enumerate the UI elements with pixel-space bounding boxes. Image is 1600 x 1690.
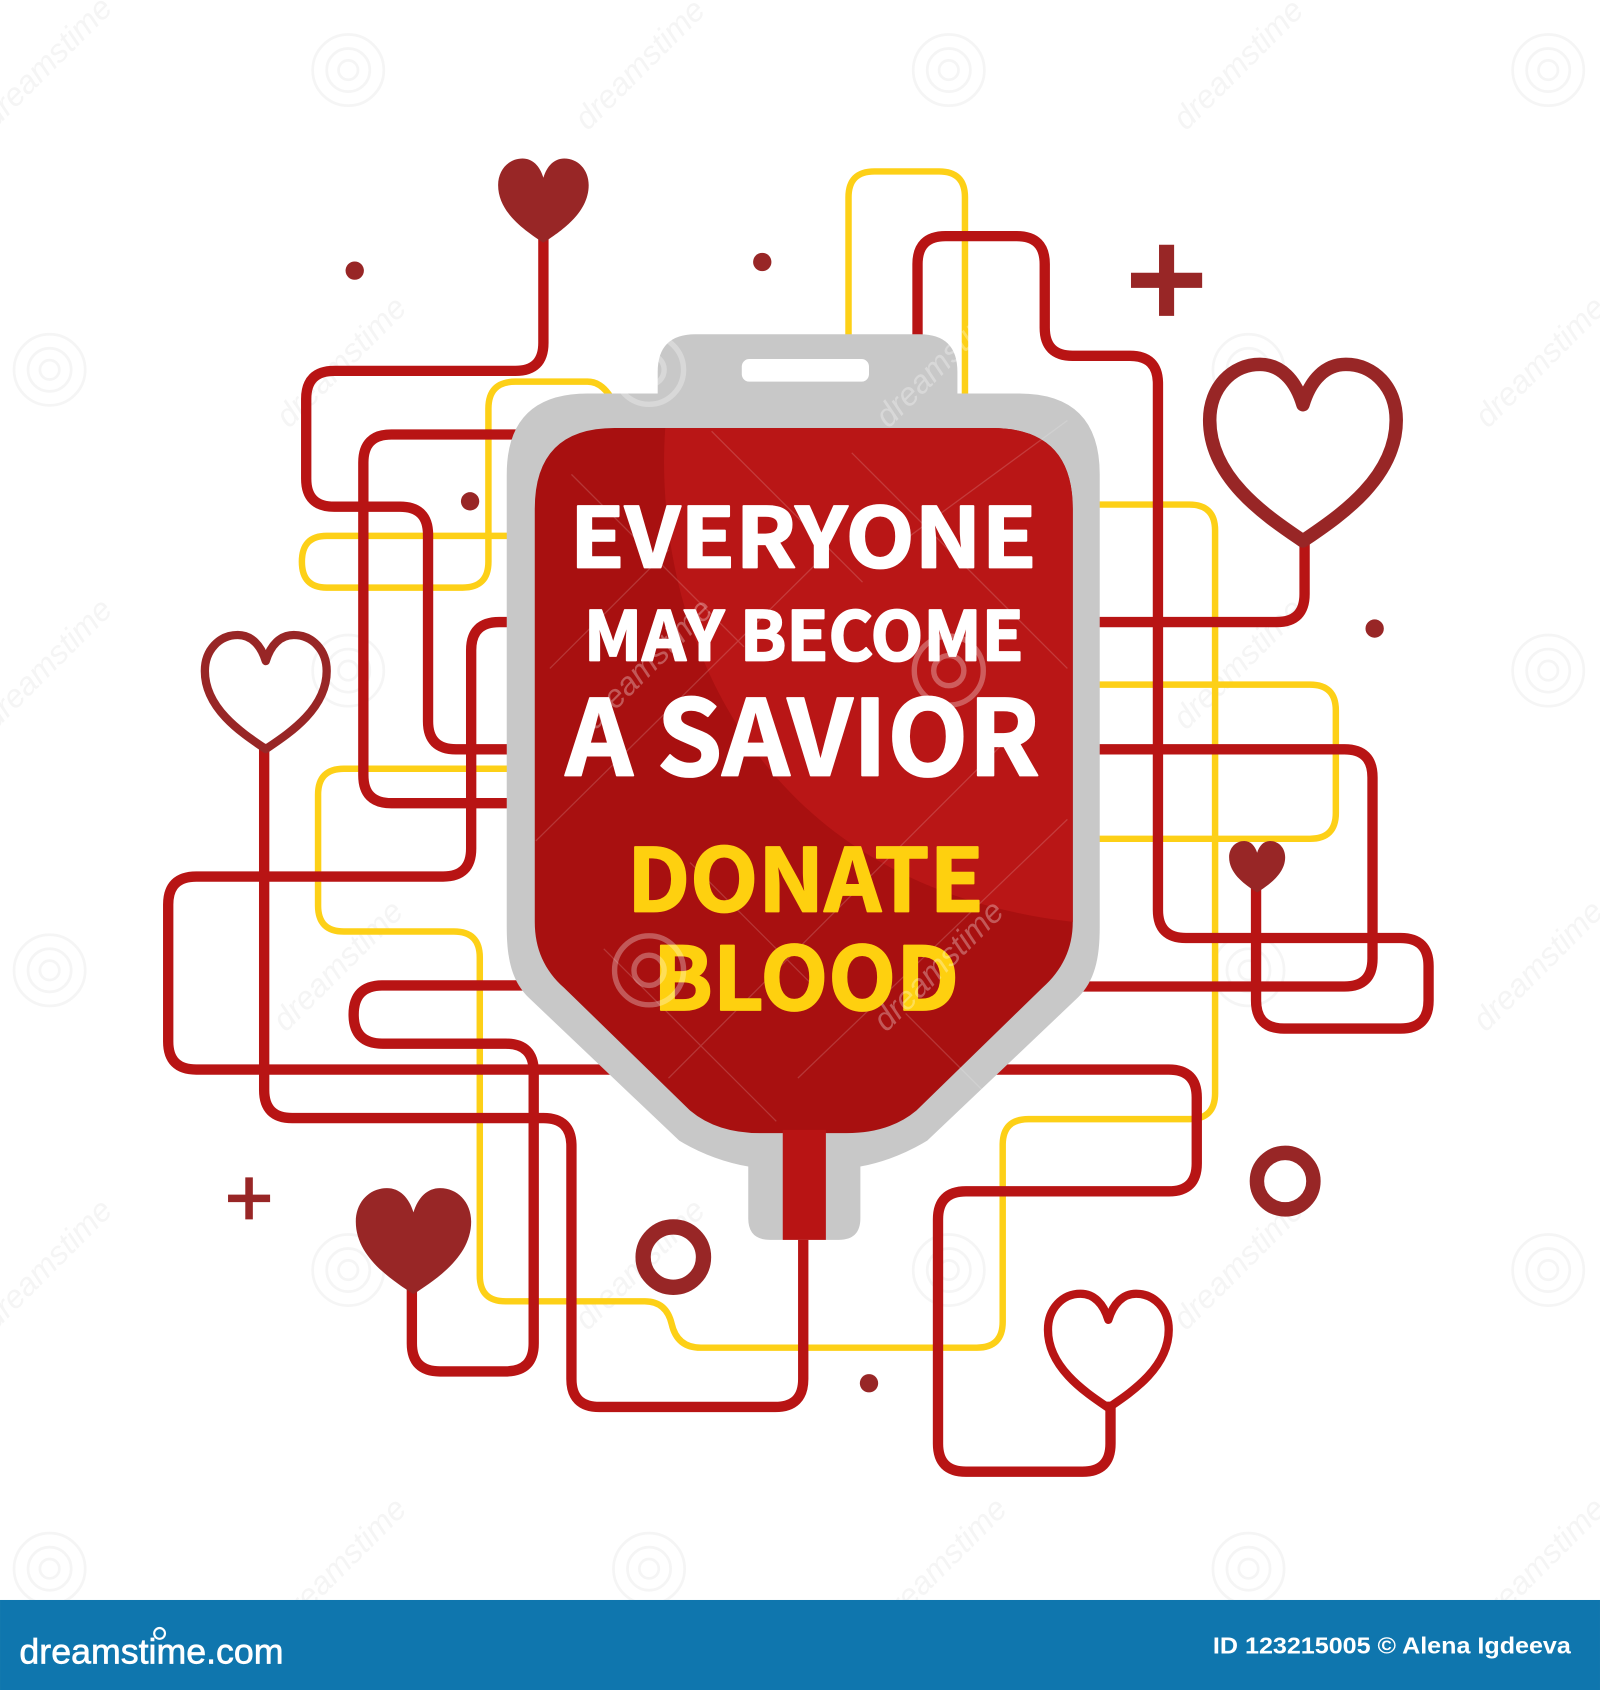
watermark pattern: dreamstime — [869, 1490, 1014, 1635]
bag: hanging slot — [742, 359, 869, 382]
heart: top filled — [498, 158, 589, 243]
heart: large outline right — [1210, 364, 1396, 541]
ring: bottom right — [1257, 1153, 1313, 1209]
bag: blood fill — [535, 428, 1073, 1133]
red tubes — [168, 232, 1429, 1472]
ring: bottom centre — [643, 1227, 704, 1287]
decorative dots — [346, 253, 1384, 1392]
slogan: blood: BLOOD — [653, 910, 959, 1036]
watermark pattern: dreamstime — [1165, 591, 1310, 736]
bag: grey shell — [507, 334, 1100, 1240]
watermark lines over bag — [536, 420, 1067, 1121]
heart: left outline — [205, 635, 327, 749]
watermark over bag: dreamstime — [575, 591, 720, 736]
watermark over bag: dreamstime — [866, 893, 1011, 1038]
bag: lighter blood highlight — [664, 428, 1073, 922]
footer: image credit: ID 123215005 © Alena Igdeeva — [1213, 1632, 1572, 1658]
watermark pattern: dreamstime — [268, 289, 413, 434]
watermark pattern: dreamstime — [1165, 1192, 1310, 1336]
watermark pattern: dreamstime — [265, 893, 410, 1038]
heart: bottom left filled — [356, 1188, 471, 1294]
footer: logo spiral — [154, 1628, 165, 1639]
footer: dreamstime logo: dreamstime.com — [19, 1632, 284, 1672]
watermark pattern: dreamstime — [268, 1490, 413, 1635]
watermark pattern: dreamstime — [567, 1192, 712, 1336]
plus: bottom left — [228, 1177, 270, 1219]
slogan: a savior: A SAVIOR — [564, 656, 1040, 807]
slogan: may become: MAY BECOME — [584, 581, 1024, 680]
heart: small filled right — [1229, 841, 1285, 893]
watermark over bag: dreamstime — [868, 289, 1013, 434]
blood bag — [507, 334, 1100, 1240]
watermark over bag — [575, 289, 1013, 1038]
bag: outlet tube — [783, 1130, 826, 1240]
yellow tubes — [302, 171, 1336, 1348]
plus: top right — [1131, 245, 1202, 316]
slogan: everyone: EVERYONE — [570, 472, 1037, 592]
footer banner — [0, 1600, 1600, 1690]
heart: bottom outline — [1048, 1294, 1169, 1408]
slogan: donate: DONATE — [627, 812, 984, 938]
